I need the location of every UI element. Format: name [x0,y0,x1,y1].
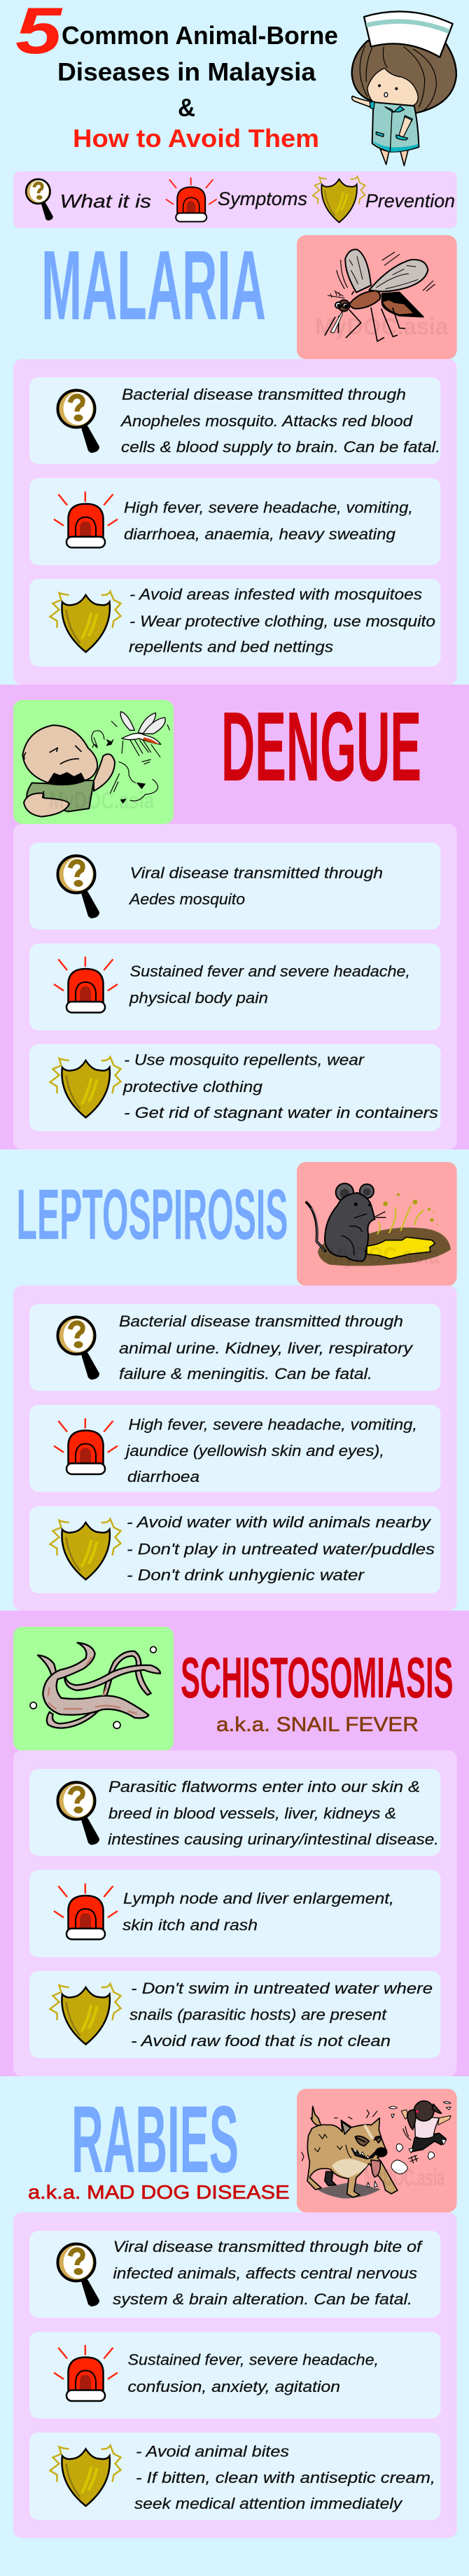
prevention text: - Avoid animal bites [136,2443,289,2460]
prevention text: seek medical attention immediately [134,2495,403,2512]
symptoms text: High fever, severe headache, vomiting, [124,499,413,517]
icon: shield [50,1519,120,1579]
card: symptoms [29,2332,441,2418]
card: what it is [29,1304,441,1391]
description [120,386,440,456]
description: breed in blood vessels, liver, kidneys & [108,1805,396,1822]
title [15,0,338,153]
section: rabies [13,2086,457,2538]
card: symptoms [29,1870,441,1957]
icon: siren [54,1884,118,1939]
description: Bacterial disease transmitted through [119,1312,403,1330]
card: what it is [29,1769,441,1856]
card: prevention [29,2432,441,2520]
description [113,2238,424,2308]
icon: siren [54,491,118,547]
title: & [178,93,195,122]
icon: magnifier [26,179,53,220]
label: prevention: Prevention [365,190,455,211]
prevention text: - Don't swim in untreated water where [131,1980,433,1997]
symptoms text: Sustained fever and severe headache, [130,962,410,980]
symptoms text: confusion, anxiety, agitation [127,2378,340,2395]
label: what it is: What it is [60,191,151,212]
icon: shield [50,2446,120,2506]
icon: magnifier [57,855,99,918]
symptoms text: jaundice (yellowish skin and eyes), [124,1442,384,1460]
title: Common Animal-Borne [62,21,338,50]
description: Aedes mosquito [128,890,245,908]
subheading: mad dog disease: a.k.a. MAD DOG DISEASE [28,2181,290,2203]
description [128,864,383,908]
icon: magnifier [57,2244,99,2306]
panel: leptospirosis info [13,1285,457,1611]
description: Bacterial disease transmitted through [122,386,406,403]
card: symptoms [29,1405,441,1492]
icon: magnifier [57,1782,99,1845]
panel: malaria info [13,359,457,685]
prevention text [130,1980,433,2050]
prevention text: - Use mosquito repellents, wear [124,1051,365,1068]
section: dengue [0,685,469,1149]
prevention text: protective clothing [122,1078,263,1096]
description: animal urine. Kidney, liver, respiratory [119,1340,414,1357]
symptoms text: diarrhoea, anaemia, heavy sweating [124,526,396,543]
card: symptoms [29,478,441,565]
prevention text: - Avoid raw food that is not clean [131,2032,391,2050]
prevention text: repellents and bed nettings [129,638,333,656]
illustration: rabid dog and girl [297,2089,457,2212]
section: rabies: RABIES [71,2086,239,2192]
prevention text [127,1513,435,1584]
prevention text: - Wear protective clothing, use mosquito [130,612,435,630]
description: infected animals, affects central nervous [113,2264,417,2282]
icon: magnifier [57,391,99,453]
icon: magnifier [57,1317,99,1380]
illustration: rat: MyDOC.asia [328,1242,440,1269]
card: what it is [29,843,441,930]
panel: schistosomiasis info [13,1750,457,2076]
symptoms text [122,1890,394,1934]
title: Diseases in Malaysia [57,57,316,86]
card: what it is [29,2231,441,2318]
illustration: man and mosquito [13,700,174,824]
icon: shield [313,176,365,223]
icon: siren [166,177,217,222]
description: Anopheles mosquito. Attacks red blood [120,412,413,430]
prevention text: - Don't play in untreated water/puddles [127,1540,435,1558]
card: prevention [29,1971,441,2058]
description: system & brain alteration. Can be fatal. [113,2290,412,2308]
icon: shield [50,1984,120,2044]
description: Parasitic flatworms enter into our skin & [108,1778,420,1795]
illustration: mosquito [297,235,457,359]
subheading: snail fever: a.k.a. SNAIL FEVER [216,1714,419,1736]
description: intestines causing urinary/intestinal disease. [108,1830,439,1848]
symptoms text: skin itch and rash [122,1917,258,1934]
description: failure & meningitis. Can be fatal. [119,1365,372,1382]
symptoms text [129,962,410,1007]
illustration: nurse [352,11,456,166]
prevention text: - Don't drink unhygienic water [127,1567,365,1584]
prevention text: - If bitten, clean with antiseptic cream, [136,2469,435,2486]
symptoms text [124,499,413,543]
card: prevention [29,1506,441,1593]
card: prevention [29,1044,441,1131]
prevention text [134,2443,435,2512]
icon: siren [54,2345,118,2401]
symptoms text [124,1415,417,1485]
prevention text: - Get rid of stagnant water in containers [124,1104,438,1121]
title: How to Avoid Them [73,124,319,153]
icon: siren [54,957,118,1012]
icon: shield [50,1057,120,1117]
section: leptospirosis [13,1162,457,1611]
section: schistosomiasis [0,1611,469,2076]
panel: dengue info [13,824,457,1149]
card: symptoms [29,944,441,1030]
panel: legend [13,172,457,228]
description [108,1778,439,1848]
prevention text [129,586,435,656]
icon: shield [50,592,120,652]
label: symptoms: Symptoms [218,188,307,209]
illustration: man and mosquito: MyDOC.asia [49,788,155,814]
symptoms text: High fever, severe headache, vomiting, [129,1415,417,1434]
symptoms text: Lymph node and liver enlargement, [123,1890,394,1907]
icon: siren [54,1418,118,1474]
panel: rabies info [13,2212,457,2538]
prevention text: snails (parasitic hosts) are present [130,2006,387,2024]
prevention text [122,1051,438,1121]
illustration: worms [13,1627,174,1751]
description: Viral disease transmitted through [130,864,383,882]
card: prevention [29,579,441,666]
illustration: mosquito: MyDOC.asia [315,314,449,340]
section: malaria [13,230,457,685]
symptoms text: Sustained fever, severe headache, [127,2351,379,2369]
symptoms text [127,2351,379,2395]
symptoms text: physical body pain [129,989,268,1007]
card: what it is [29,377,441,464]
illustration: rat [297,1162,457,1286]
description: cells & blood supply to brain. Can be fatal. [121,438,440,456]
description: Viral disease transmitted through bite of [113,2238,424,2255]
symptoms text: diarrhoea [127,1468,200,1485]
prevention text: - Avoid areas infested with mosquitoes [130,586,422,603]
prevention text: - Avoid water with wild animals nearby [127,1513,432,1531]
description [119,1312,414,1382]
